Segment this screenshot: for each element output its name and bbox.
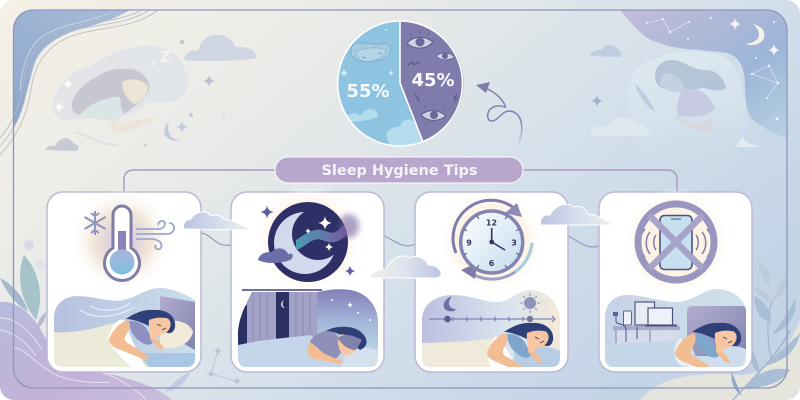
title pill (275, 157, 523, 183)
card 2: dark room (231, 186, 384, 372)
decoration: bottom constellation (207, 347, 241, 385)
scene: woman sleeping in cool bed (54, 285, 196, 370)
decoration: bottom-left purple wave (0, 302, 172, 400)
cloud between cards 3 and 4 (541, 204, 612, 225)
decoration: bottom-left leaves (0, 240, 190, 392)
pie chart: 55% asleep, 45% awake (338, 21, 464, 146)
label: 45%: 45% (411, 70, 455, 91)
card 4: no screens before bed (599, 188, 752, 373)
decoration: right ghost sleeping woman (590, 44, 760, 147)
icon: clock with cycle arrows (453, 200, 532, 279)
icon: clock with cycle arrows: 12 (486, 218, 497, 228)
label: 55%: 55% (346, 81, 390, 102)
heading: Sleep Hygiene Tips (322, 163, 478, 179)
scene: devices away from bed (605, 289, 746, 367)
curly arrow pointing to pie (476, 82, 522, 147)
wavy connectors between cards (201, 233, 599, 247)
decoration: top-right night sky (620, 10, 790, 140)
decoration: left ghost sleeping woman: z (150, 59, 155, 69)
scene: dark curtains and sleep mask (238, 285, 380, 370)
icon: snowflake (84, 211, 106, 235)
card 3: consistent schedule (415, 190, 568, 373)
decoration: left ghost sleeping woman: Z (160, 48, 171, 66)
scene: sleep timeline (422, 290, 560, 367)
icon: thermometer (105, 206, 140, 281)
connector lines from title pill to cards (124, 170, 677, 192)
icon: clock with cycle arrows: 9 (466, 238, 472, 248)
icon: clock with cycle arrows: 6 (489, 259, 495, 268)
decoration: bottom-right cream band and leaves (640, 262, 800, 400)
icon: wind (136, 221, 174, 249)
decoration: top-left waves (0, 10, 157, 155)
icon: moon with aurora (258, 202, 359, 282)
cloud between cards 2 and 3 (368, 256, 441, 278)
card 1: cool room temperature (47, 188, 201, 372)
cloud between cards 1 and 2 (183, 212, 252, 230)
icon: phone crossed out (638, 204, 714, 280)
decoration: left ghost sleeping woman (45, 35, 256, 151)
icon: clock with cycle arrows: 3 (511, 238, 517, 248)
